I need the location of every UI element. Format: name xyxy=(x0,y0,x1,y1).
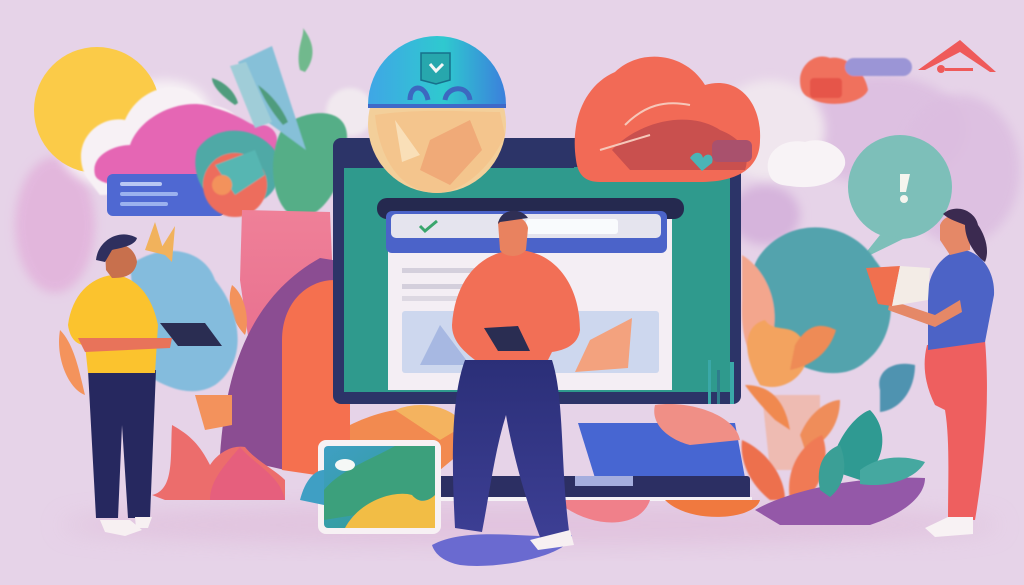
alert bubble xyxy=(848,135,952,260)
right woman arm xyxy=(888,300,962,327)
small leaves near left person xyxy=(145,222,175,262)
plant: bottom left pink xyxy=(152,425,285,500)
icon: sun xyxy=(34,47,160,173)
circle badge: dome and face xyxy=(368,36,506,193)
blue blob behind left person xyxy=(130,251,238,391)
cloud badge: red xyxy=(575,57,760,182)
cloud: white right xyxy=(768,140,845,187)
plant: purple pot and teal leaves right xyxy=(755,410,925,525)
center man legs xyxy=(453,360,570,542)
monitor header dark bar xyxy=(344,140,574,168)
panel: pink column xyxy=(240,210,335,350)
left man tablet xyxy=(160,323,222,346)
left man shoes xyxy=(100,517,152,536)
right woman head xyxy=(940,215,970,255)
shape: orange arch xyxy=(282,280,350,480)
person: left man xyxy=(68,234,222,536)
background haze clouds xyxy=(15,75,1020,545)
icon: house roof xyxy=(918,40,996,73)
person: center man xyxy=(452,211,580,550)
center man shoe xyxy=(530,530,574,550)
person: right woman xyxy=(866,209,994,537)
left man arm xyxy=(78,338,172,352)
small chart bars xyxy=(708,360,734,404)
center man phone xyxy=(484,326,530,351)
right woman tablet xyxy=(866,266,900,306)
browser window xyxy=(377,198,684,390)
right woman shoe xyxy=(925,517,973,537)
right woman tablet page xyxy=(892,266,930,306)
cluster: teal and orange blob xyxy=(195,131,280,217)
left man shirt xyxy=(68,275,158,373)
top right clouds xyxy=(800,57,912,104)
center man torso xyxy=(452,250,580,360)
monitor xyxy=(333,138,741,404)
tablet: map card xyxy=(300,441,440,533)
center man hair xyxy=(498,211,528,224)
plant: orange flowers right xyxy=(742,320,915,505)
orange puddle and swooshes xyxy=(350,404,760,522)
left man hair xyxy=(96,234,137,262)
plant: leaves xyxy=(212,28,347,218)
right woman hair xyxy=(943,209,987,262)
left man head xyxy=(105,244,137,278)
cloud: white left xyxy=(81,87,246,195)
center man head xyxy=(498,216,528,256)
shape: purple arch xyxy=(220,258,345,470)
cloud: pink xyxy=(94,104,277,194)
swoosh: bottom purple xyxy=(432,534,572,566)
chat bubble: blue with text lines xyxy=(107,174,225,216)
orange leaves left xyxy=(59,285,247,430)
right woman shirt xyxy=(928,250,994,350)
laptop: base and screen xyxy=(430,423,752,501)
right woman legs xyxy=(925,340,987,520)
left man legs xyxy=(88,370,156,518)
plant: bottom left magenta leaf xyxy=(210,447,285,500)
plant: teal bush right xyxy=(742,227,891,373)
